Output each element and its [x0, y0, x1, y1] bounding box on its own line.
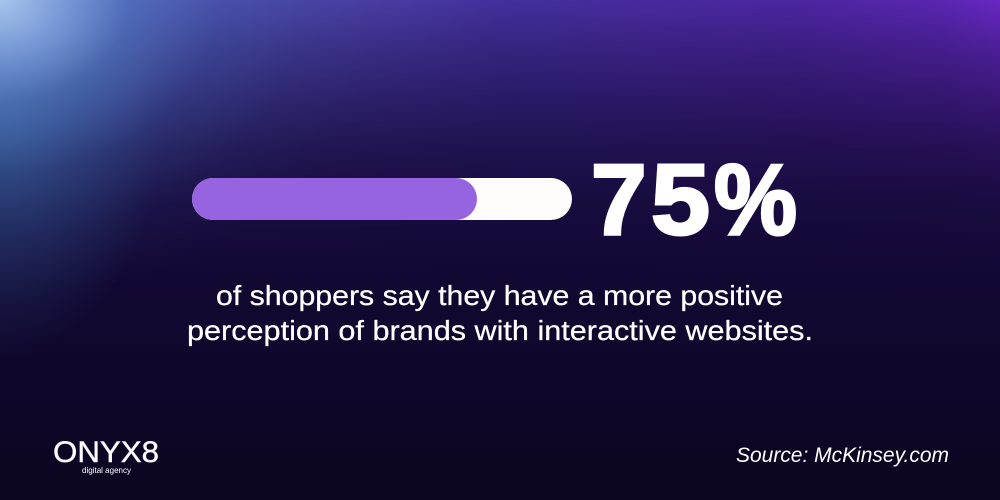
statistic: 75%	[591, 144, 797, 256]
logo: ONYX8 digital agency: digital agency	[82, 465, 132, 475]
statistic: 75%: 5	[651, 144, 710, 256]
source note: Source: McKinsey.com	[736, 444, 949, 467]
bar track	[192, 178, 572, 220]
background gradient	[0, 0, 1000, 400]
logo: ONYX8 digital agency: ONYX8	[53, 436, 159, 469]
statistic: 75%: %	[714, 144, 797, 256]
description text: perception of brands with interactive websites.	[187, 315, 813, 346]
progress bar	[192, 178, 572, 220]
description text	[187, 280, 813, 346]
description text: of shoppers say they have a more positive	[216, 280, 783, 311]
statistic: 75%: 7	[591, 144, 647, 256]
bar fill at 75%	[192, 178, 477, 220]
